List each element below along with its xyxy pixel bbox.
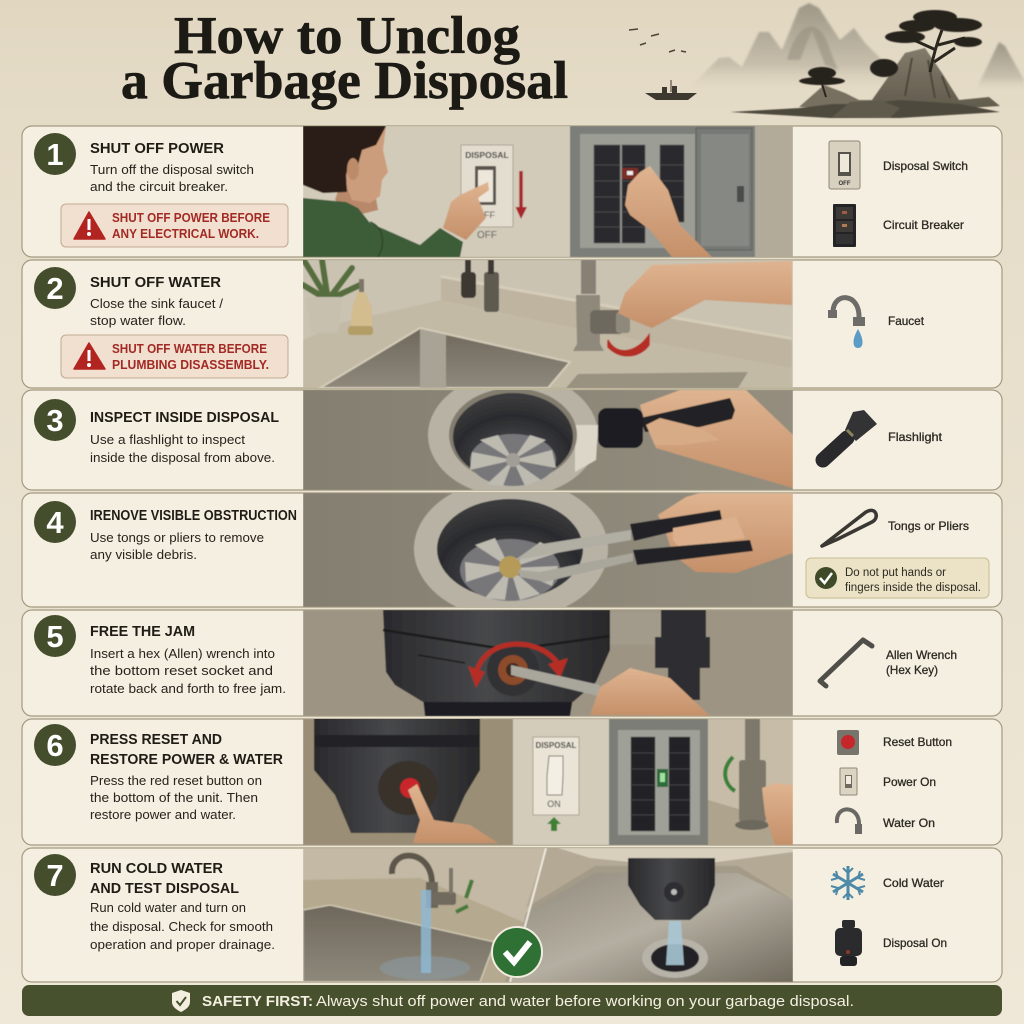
step 2 text: stop water flow. <box>90 313 186 328</box>
icon: tongs <box>822 510 876 546</box>
step 1 text: and the circuit breaker. <box>90 179 228 194</box>
number badge 4: 4 <box>46 505 64 540</box>
tools 3 <box>823 410 943 460</box>
icon: disposal switch: OFF <box>838 181 851 187</box>
tools 4: Tongs or Pliers <box>888 519 969 533</box>
step 4 text: any visible debris. <box>90 547 197 562</box>
step 6 text: RESTORE POWER & WATER <box>90 752 284 768</box>
photo 1: man switching off disposal and breaker <box>303 126 793 257</box>
photo 6: reset button, switch on, breaker, faucet: DISPOSAL <box>536 741 577 750</box>
number badge 3: 3 <box>46 403 64 438</box>
step 5 text: FREE THE JAM <box>90 624 195 640</box>
icon: flashlight <box>823 410 877 460</box>
step 3 text: INSPECT INSIDE DISPOSAL <box>90 410 279 426</box>
icon: shield <box>172 990 190 1012</box>
step 3 text: inside the disposal from above. <box>90 450 275 465</box>
step 7 text: the disposal. Check for smooth <box>90 919 273 934</box>
step 5: free the jam <box>22 610 1002 716</box>
step 6 text: Press the red reset button on <box>90 773 262 788</box>
card 4 <box>22 493 1002 607</box>
tools 5 <box>820 640 957 686</box>
number badge 2 <box>34 267 76 309</box>
icon: water on <box>837 809 862 834</box>
card 7 <box>22 848 1002 982</box>
warning 1: ANY ELECTRICAL WORK. <box>112 226 259 241</box>
icon: faucet <box>828 298 865 348</box>
step 7 text: AND TEST DISPOSAL <box>90 881 239 897</box>
step 4 text: IRENOVE VISIBLE OBSTRUCTION <box>90 508 297 524</box>
tools 5: Allen Wrench <box>886 648 957 662</box>
card 5 <box>22 610 1002 716</box>
step 4 text <box>34 501 297 562</box>
number badge 4 <box>34 501 76 543</box>
illustration: ink landscape <box>629 3 1024 118</box>
step 5 text: rotate back and forth to free jam. <box>90 681 286 696</box>
step 2 text: SHUT OFF WATER <box>90 275 222 291</box>
number badge 1 <box>34 133 76 175</box>
number badge 2: 2 <box>46 271 64 306</box>
tools 6 <box>837 730 952 834</box>
photo 5: allen wrench in socket <box>303 610 793 716</box>
photo 1: man switching off disposal and breaker: OFF <box>477 230 497 241</box>
step 5 text: the bottom reset socket and <box>90 663 273 678</box>
step 3 text: Use a flashlight to inspect <box>90 432 245 447</box>
icon: allen wrench <box>820 640 872 686</box>
icon: power on <box>840 768 857 795</box>
step 1 text: SHUT OFF POWER <box>90 141 225 157</box>
tools 2: Faucet <box>888 314 925 328</box>
photo 6: reset button, switch on, breaker, faucet: ON <box>547 799 561 809</box>
tools 5: (Hex Key) <box>886 663 938 677</box>
tools 6: Reset Button <box>883 735 952 749</box>
number badge 5: 5 <box>46 619 64 654</box>
icon: reset button <box>837 730 859 755</box>
footer banner: safety first: SAFETY FIRST: <box>202 994 313 1010</box>
photo 6: reset button, switch on, breaker, faucet <box>303 718 793 845</box>
tools 1 <box>829 141 968 247</box>
card 1 <box>22 126 1002 257</box>
warning 2: SHUT OFF WATER BEFORE <box>112 341 267 356</box>
step 1 text <box>34 133 288 247</box>
photo 1: man switching off disposal and breaker: DISPOSAL <box>465 150 509 160</box>
step 2 text: Close the sink faucet / <box>90 296 223 311</box>
icon: disposal unit <box>835 920 862 966</box>
step 7 text: Run cold water and turn on <box>90 900 246 915</box>
number badge 5 <box>34 615 76 657</box>
hills <box>700 48 1000 118</box>
card 2 <box>22 260 1002 388</box>
footer banner: safety first: Always shut off power and water before working on your garbage disposal. <box>316 994 854 1010</box>
tools 7: Cold Water <box>883 876 944 890</box>
photo 7: cold water running and disposal test <box>303 848 793 982</box>
step 2 text <box>34 267 288 378</box>
tools 7 <box>831 866 947 966</box>
tools 1: Circuit Breaker <box>883 218 964 232</box>
warning 2 <box>61 335 288 378</box>
callout: keep hands out <box>806 558 989 598</box>
title: How to Unclog <box>174 7 520 65</box>
step 3 text <box>34 399 279 465</box>
photo 1: man switching off disposal and breaker: FF <box>484 210 495 220</box>
tools 6: Water On <box>883 816 935 830</box>
step 1: shut off power <box>22 126 1002 257</box>
birds <box>629 29 686 52</box>
number badge 3 <box>34 399 76 441</box>
step 7 text: operation and proper drainage. <box>90 937 275 952</box>
photo 2: hand closing faucet <box>303 260 793 388</box>
footer banner: safety first <box>22 985 1002 1016</box>
photo 3: flashlight inspection <box>303 390 793 490</box>
step 6 text: restore power and water. <box>90 807 236 822</box>
tools 3: Flashlight <box>888 430 943 444</box>
card 3 <box>22 390 1002 490</box>
step 6 text: PRESS RESET AND <box>90 732 222 748</box>
callout: keep hands out: Do not put hands or <box>845 567 946 579</box>
icon: snowflake <box>831 866 865 900</box>
warning 1: SHUT OFF POWER BEFORE <box>112 210 270 225</box>
number badge 7 <box>34 854 76 896</box>
step 5 text <box>34 615 286 696</box>
photo 4: tongs removing debris <box>303 493 793 607</box>
step 6: press reset and restore <box>22 718 1002 845</box>
title <box>121 7 568 110</box>
icon: circuit breaker <box>833 204 856 247</box>
callout: keep hands out: fingers inside the disposal. <box>845 582 981 594</box>
icon: success check <box>492 927 542 977</box>
step 4 text: Use tongs or pliers to remove <box>90 530 264 545</box>
tools 4 <box>806 510 989 598</box>
step 1 text: Turn off the disposal switch <box>90 162 254 177</box>
step 7 text: RUN COLD WATER <box>90 861 224 877</box>
number badge 7: 7 <box>46 858 64 893</box>
boat <box>645 80 697 104</box>
trees <box>905 30 965 72</box>
step 6 text: the bottom of the unit. Then <box>90 790 258 805</box>
step 2: shut off water <box>22 260 1002 388</box>
warning 1 <box>61 204 288 247</box>
step 4: remove visible obstruction <box>21 492 1003 608</box>
number badge 6 <box>34 724 76 766</box>
number badge 1: 1 <box>46 137 64 172</box>
step 5 text: Insert a hex (Allen) wrench into <box>90 646 275 661</box>
tools 2 <box>828 298 925 348</box>
title: a Garbage Disposal <box>121 52 568 110</box>
step 7: run cold water and test <box>22 848 1002 982</box>
tools 1: Disposal Switch <box>883 159 968 173</box>
step 3: inspect inside disposal <box>21 389 1003 491</box>
number badge 6: 6 <box>46 728 64 763</box>
card 6 <box>22 719 1002 845</box>
warning 2: PLUMBING DISASSEMBLY. <box>112 357 269 372</box>
tools 6: Power On <box>883 775 936 789</box>
tools 7: Disposal On <box>883 936 947 950</box>
step 7 text <box>34 854 275 952</box>
step 6 text <box>34 724 284 822</box>
